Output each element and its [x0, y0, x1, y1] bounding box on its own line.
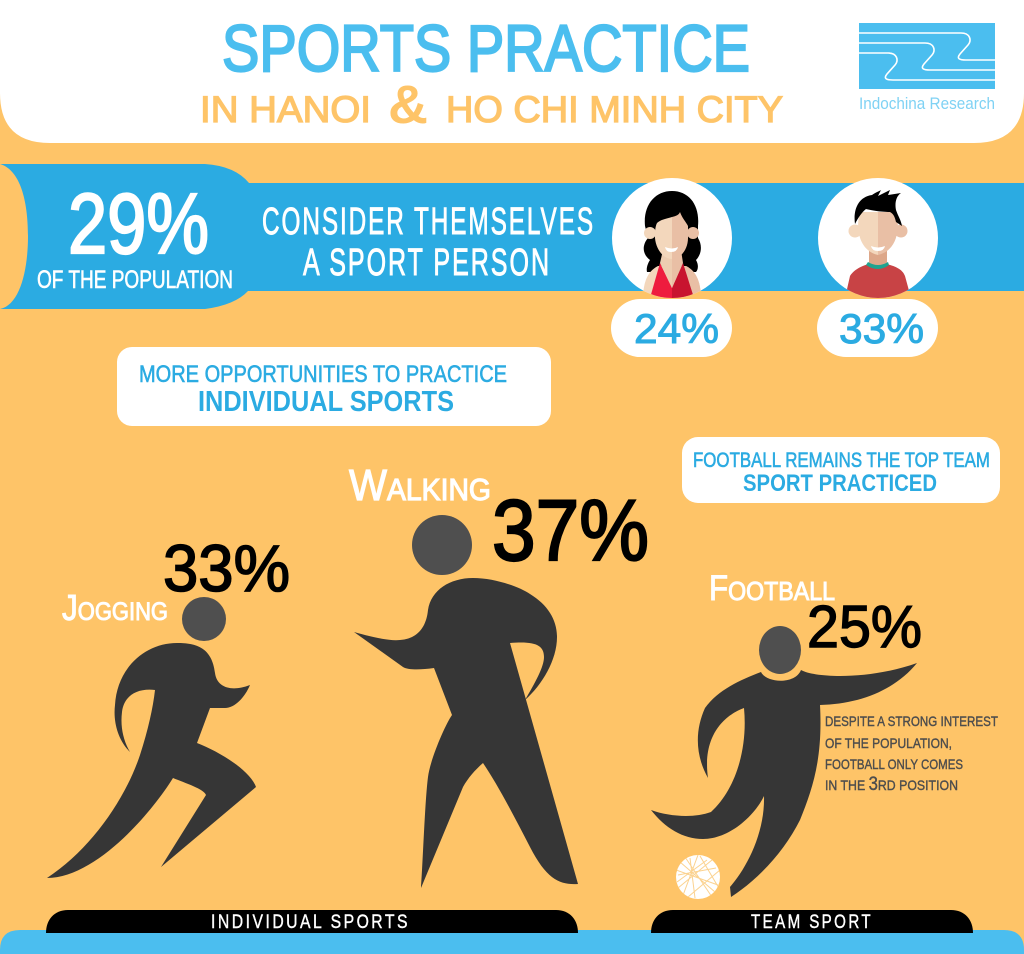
subtitle: IN HANOI — [200, 89, 371, 130]
football note: FOOTBALL ONLY COMES — [825, 756, 963, 772]
icon: man avatar — [818, 178, 938, 298]
callout: individual sports: MORE OPPORTUNITIES TO PRACTICE — [139, 361, 507, 388]
header panel — [0, 0, 1024, 143]
football note: OF THE POPULATION, — [825, 735, 952, 751]
category bar: individual sports — [46, 910, 578, 933]
callout: individual sports — [117, 347, 551, 426]
stat pill: women 24% — [611, 299, 732, 357]
footer bar — [0, 930, 1024, 954]
stat: jogging 33%: 33% — [163, 531, 290, 605]
label: walking: WALKING — [349, 461, 491, 510]
title: SPORTS PRACTICE — [222, 11, 750, 85]
jogging figure — [47, 597, 256, 878]
category bar: individual sports: INDIVIDUAL SPORTS — [211, 912, 410, 933]
callout: football: SPORT PRACTICED — [743, 470, 937, 497]
category bar: team sport: TEAM SPORT — [751, 912, 873, 933]
callout: individual sports: INDIVIDUAL SPORTS — [198, 386, 454, 418]
label: jogging: JOGGING — [62, 587, 168, 628]
logo: Indochina Research: Indochina Research — [859, 95, 995, 113]
stat label: OF THE POPULATION — [37, 266, 233, 294]
banner headline: CONSIDER THEMSELVES — [262, 201, 595, 243]
stat: football 25%: 25% — [807, 594, 922, 660]
stat pill: men 33% — [817, 299, 938, 357]
category bar: team sport — [651, 910, 973, 933]
icon: ball — [676, 855, 720, 899]
stat: 29%: 29% — [68, 177, 209, 272]
stat: walking 37%: 37% — [492, 483, 649, 579]
logo: Indochina Research — [859, 23, 995, 113]
subtitle: & — [388, 75, 428, 135]
icon: woman avatar — [612, 178, 732, 300]
banner — [0, 164, 1024, 309]
subtitle: HO CHI MINH CITY — [446, 89, 783, 130]
walking figure — [354, 515, 578, 888]
stat pill: women 24%: 24% — [634, 305, 719, 352]
stat pill: men 33%: 33% — [839, 305, 924, 352]
football figure — [651, 626, 917, 897]
callout: football — [682, 437, 1000, 503]
subtitle — [200, 75, 783, 135]
banner headline: A SPORT PERSON — [303, 242, 551, 284]
banner headline — [262, 201, 595, 284]
football note — [825, 713, 998, 795]
label: football: FOOTBALL — [709, 569, 835, 608]
football note: IN THE 3RD POSITION — [825, 774, 958, 795]
